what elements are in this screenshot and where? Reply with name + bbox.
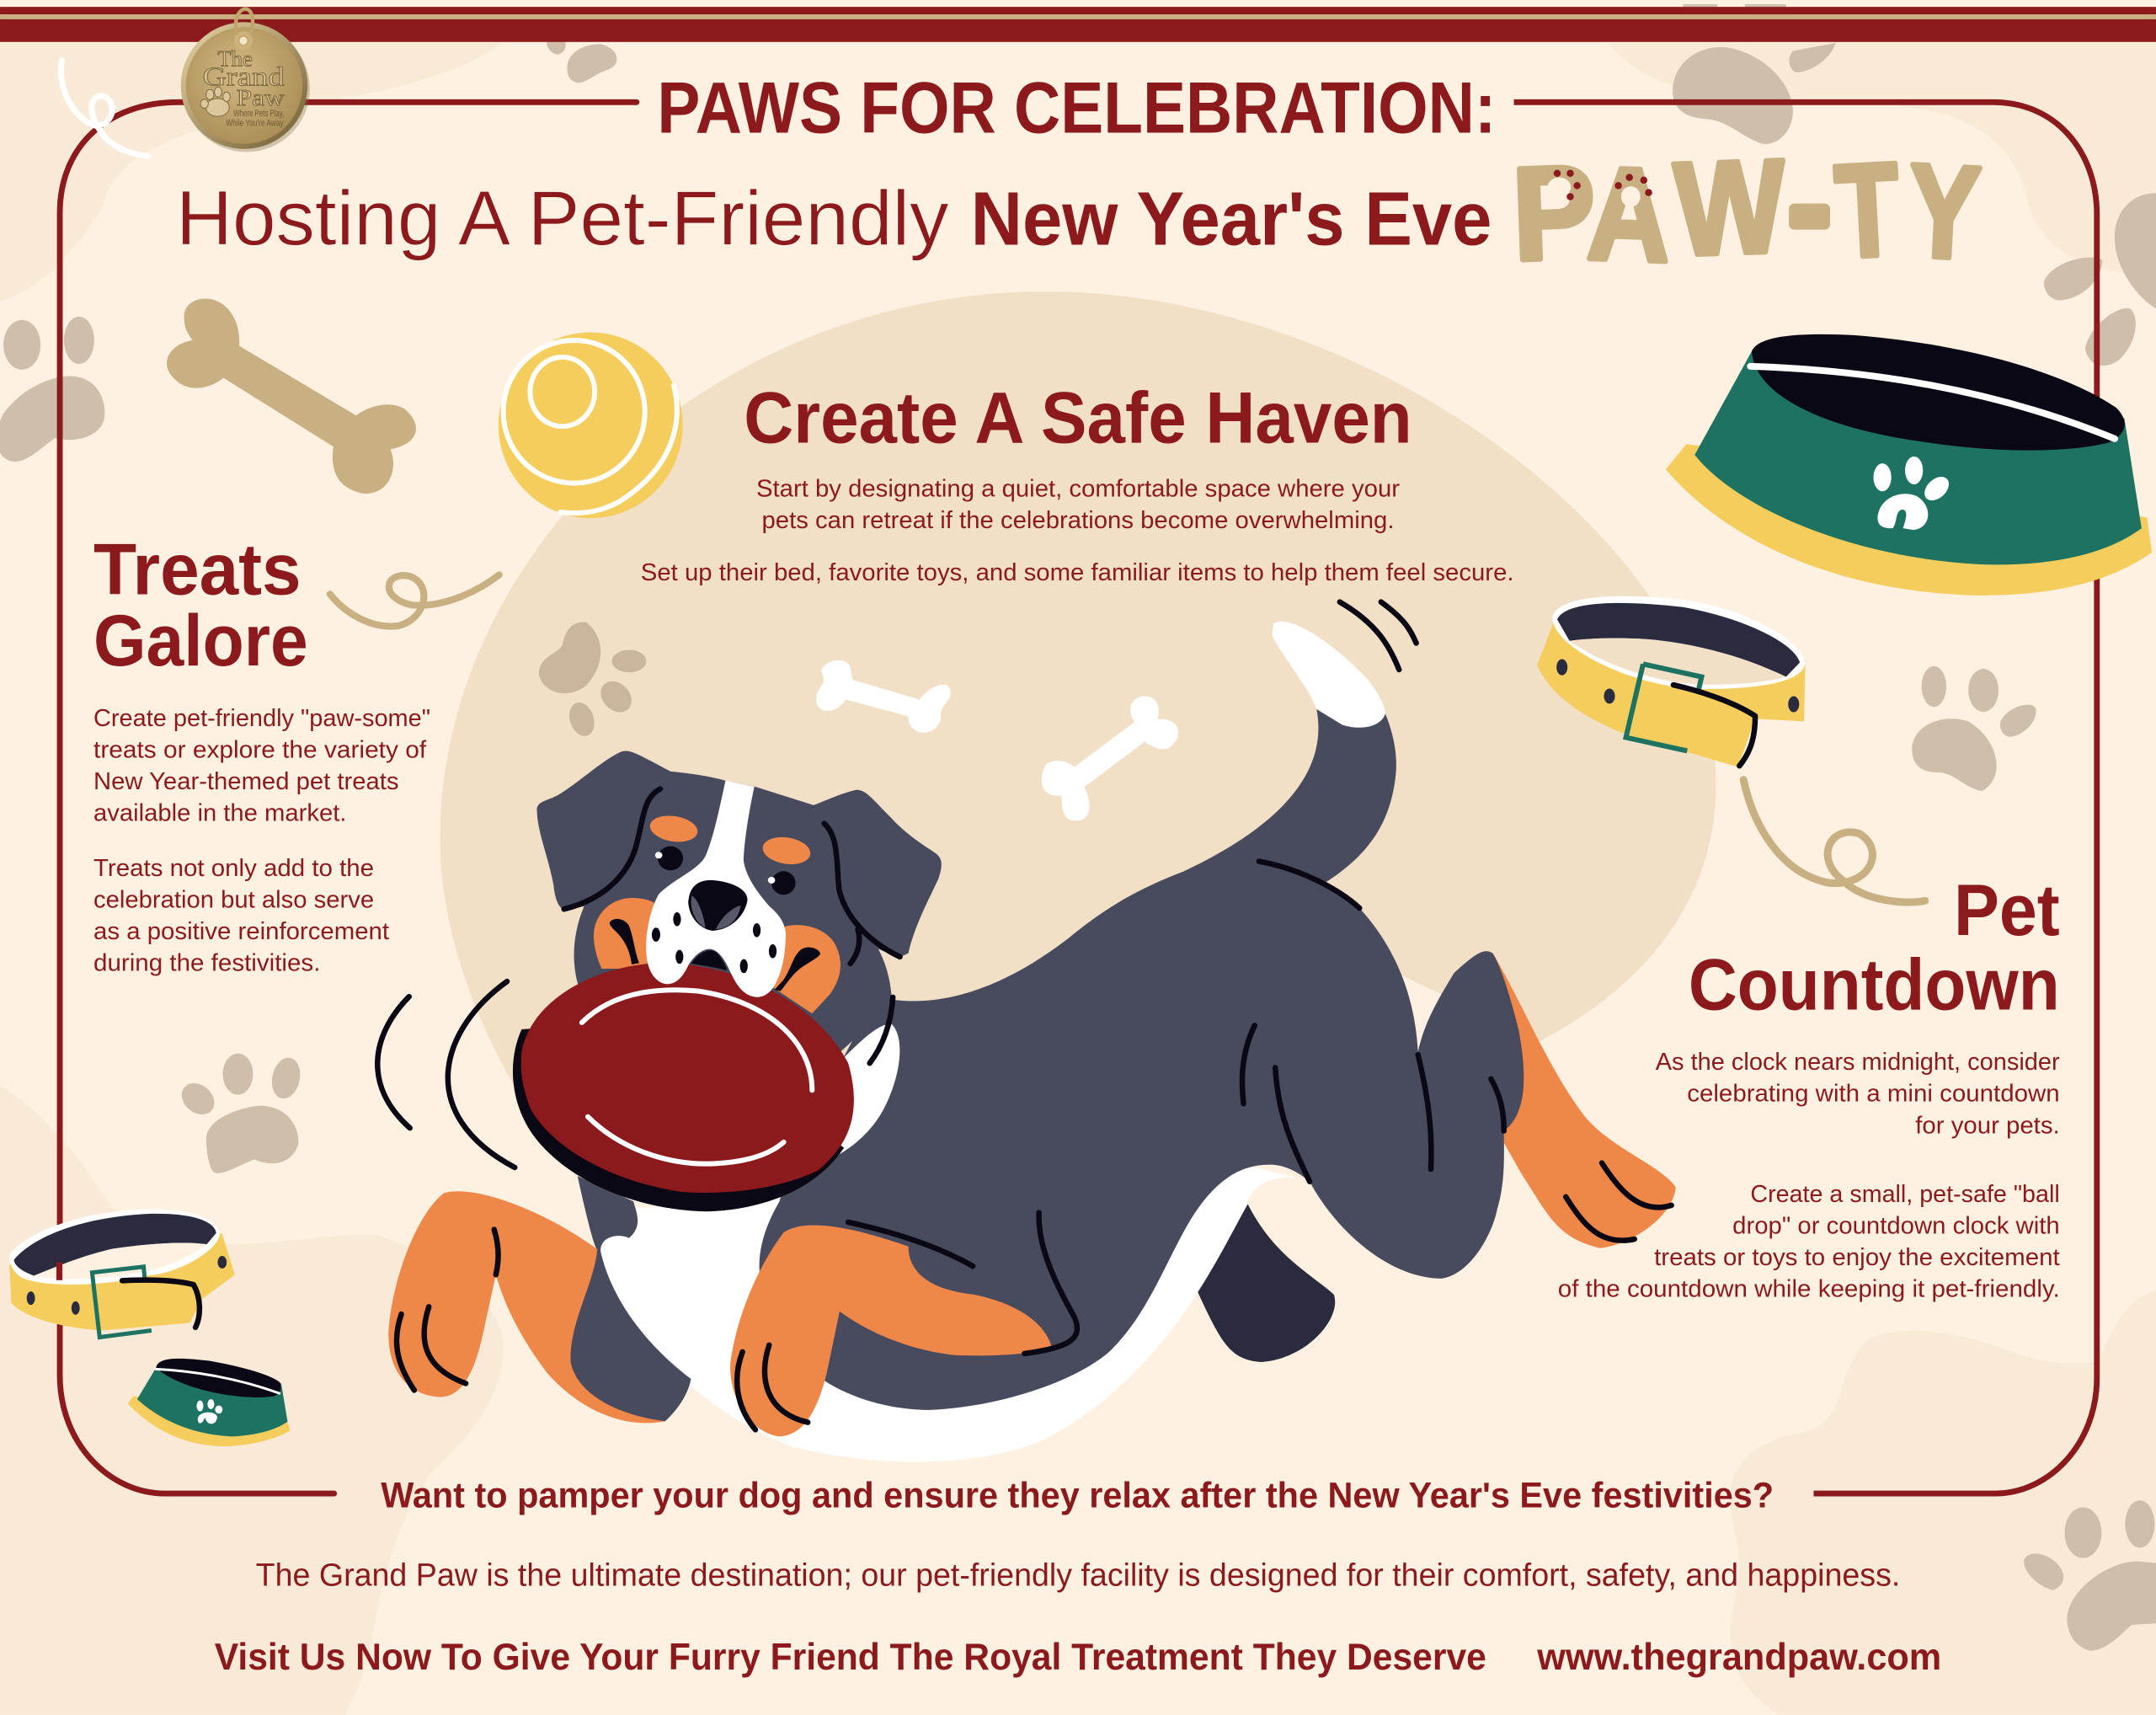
logo medal: Paw <box>237 85 286 111</box>
text block: countdown: celebrating with a mini countdown <box>1687 1081 2060 1108</box>
belly white <box>600 1153 1308 1461</box>
central beige blob <box>440 291 1716 1141</box>
paw: top right <box>1673 4 1836 144</box>
PAW-TY lettering: T <box>1832 136 1903 286</box>
heading: pet countdown: Pet <box>1954 870 2060 951</box>
background blob: bottom right <box>1730 1290 2156 1715</box>
heading: treats galore <box>93 529 308 681</box>
icon: yellow ball <box>499 333 683 518</box>
logo medal: Grand <box>203 62 285 92</box>
frame: left <box>60 102 637 1493</box>
background blob: top left <box>0 41 502 302</box>
text block: countdown: drop" or countdown clock with <box>1732 1212 2060 1239</box>
head and ears <box>537 751 942 1055</box>
tail tip <box>1272 622 1385 728</box>
PAW-TY lettering: W <box>1673 132 1787 284</box>
text block: countdown <box>1558 1049 2060 1303</box>
far hind leg <box>1196 1205 1335 1362</box>
heading: treats galore: Treats <box>93 529 302 610</box>
logo medal <box>181 9 310 152</box>
text block: treats: during the festivities. <box>93 950 320 977</box>
white bones <box>539 622 1178 820</box>
dog head <box>537 751 942 1055</box>
dog outlines <box>377 602 1672 1429</box>
paw on beige <box>539 622 646 737</box>
text block: treats: celebration but also serve <box>93 887 374 914</box>
text block: treats: New Year-themed pet treats <box>93 768 398 795</box>
motion lines: frisbee <box>377 996 410 1128</box>
paw: top centre <box>547 41 617 83</box>
background blob: bottom left <box>0 1087 504 1715</box>
icon: large green bowl <box>1666 334 2152 596</box>
white chest patch <box>831 1023 899 1159</box>
mouth <box>691 950 728 970</box>
background blob: top right <box>1608 41 2156 276</box>
text block: treats <box>93 705 430 977</box>
text block: treats: available in the market. <box>93 800 346 827</box>
callout: question: Want to pamper your dog and ensure they relax after the New Year's Eve festivities? <box>381 1475 1774 1515</box>
near hind leg orange <box>1492 954 1676 1248</box>
callout: description: The Grand Paw is the ultimate destination; our pet-friendly facility is designed for their comfort, safety, and happiness. <box>256 1557 1900 1593</box>
cheek right <box>770 925 841 1013</box>
logo medal: While You're Away <box>226 119 284 129</box>
icon: tan bone <box>167 299 416 494</box>
paw: lower left <box>175 1054 304 1173</box>
paw: far right <box>2044 193 2156 366</box>
white curl <box>61 60 148 156</box>
tan curl left <box>330 574 499 627</box>
PAW-TY lettering: Y <box>1904 136 1983 287</box>
eyes <box>658 847 796 895</box>
website: www.thegrandpaw.com <box>1536 1637 1941 1678</box>
title: PAWS FOR CELEBRATION: <box>657 68 1496 149</box>
chest dark <box>570 1176 691 1421</box>
torso <box>760 709 1524 1410</box>
ear lines <box>564 789 660 909</box>
muzzle spots <box>652 912 776 973</box>
medal ring <box>236 9 253 35</box>
text block: countdown: Create a small, pet-safe "ball <box>1750 1181 2060 1208</box>
icon: bone two <box>1042 697 1178 820</box>
text block: countdown: for your pets. <box>1915 1112 2060 1139</box>
mouth corners <box>610 919 820 991</box>
far front leg orange <box>388 1191 665 1423</box>
PAW-TY lettering: P <box>1510 138 1598 289</box>
muzzle <box>646 781 786 997</box>
icon: large collar <box>1537 596 1806 767</box>
heading: create a safe haven: Create A Safe Haven <box>744 378 1412 459</box>
text block: countdown: As the clock nears midnight, consider <box>1656 1049 2060 1076</box>
top bars <box>0 7 2156 42</box>
text block: safe haven: Set up their bed, favorite toys, and some familiar items to help them feel secure. <box>641 559 1514 586</box>
text block: safe haven: Start by designating a quiet, comfortable space where your <box>756 475 1401 502</box>
text block: countdown: treats or toys to enjoy the excitement <box>1654 1244 2060 1271</box>
text block: treats: Create pet-friendly "paw-some" <box>93 705 430 732</box>
cheek left <box>594 898 654 969</box>
frisbee <box>513 963 854 1211</box>
logo medal: The <box>217 46 253 72</box>
PAW-TY lettering: A <box>1585 140 1673 290</box>
text block: treats: as a positive reinforcement <box>93 918 389 945</box>
heading: pet countdown: Countdown <box>1689 944 2060 1025</box>
callout: call to action: Visit Us Now To Give Your Furry Friend The Royal Treatment They Deserve <box>215 1637 1486 1678</box>
heading: treats galore: Galore <box>93 601 308 681</box>
icon: small bowl <box>128 1359 291 1446</box>
subtitle: Hosting A Pet-Friendly <box>176 176 949 262</box>
text block: treats: Treats not only add to the <box>93 855 374 882</box>
text block: countdown: of the countdown while keeping it pet-friendly. <box>1558 1276 2060 1303</box>
dog illustration <box>377 602 1676 1461</box>
subtitle bold: New Year's Eve <box>971 178 1492 262</box>
logo medal: Where Pets Play, <box>233 109 284 119</box>
icon: bone one <box>816 660 951 733</box>
paw: bottom right <box>2024 1500 2156 1651</box>
near front leg orange <box>730 1225 1052 1436</box>
paw: right middle <box>1912 666 2036 791</box>
heading: pet countdown <box>1689 870 2060 1025</box>
motion lines: tail <box>1340 602 1399 670</box>
eyebrows <box>648 813 700 845</box>
PAW-TY lettering <box>1510 132 1983 290</box>
frame: right <box>1514 102 2097 1493</box>
dog body <box>388 622 1676 1461</box>
paw: far left <box>0 317 104 462</box>
tan curl right <box>1743 780 1925 902</box>
text block: treats: treats or explore the variety of <box>93 737 426 764</box>
nose <box>688 880 748 931</box>
text block: safe haven: pets can retreat if the celebrations become overwhelming. <box>761 507 1395 534</box>
icon: small collar <box>9 1210 235 1338</box>
text block: safe haven <box>641 475 1514 586</box>
